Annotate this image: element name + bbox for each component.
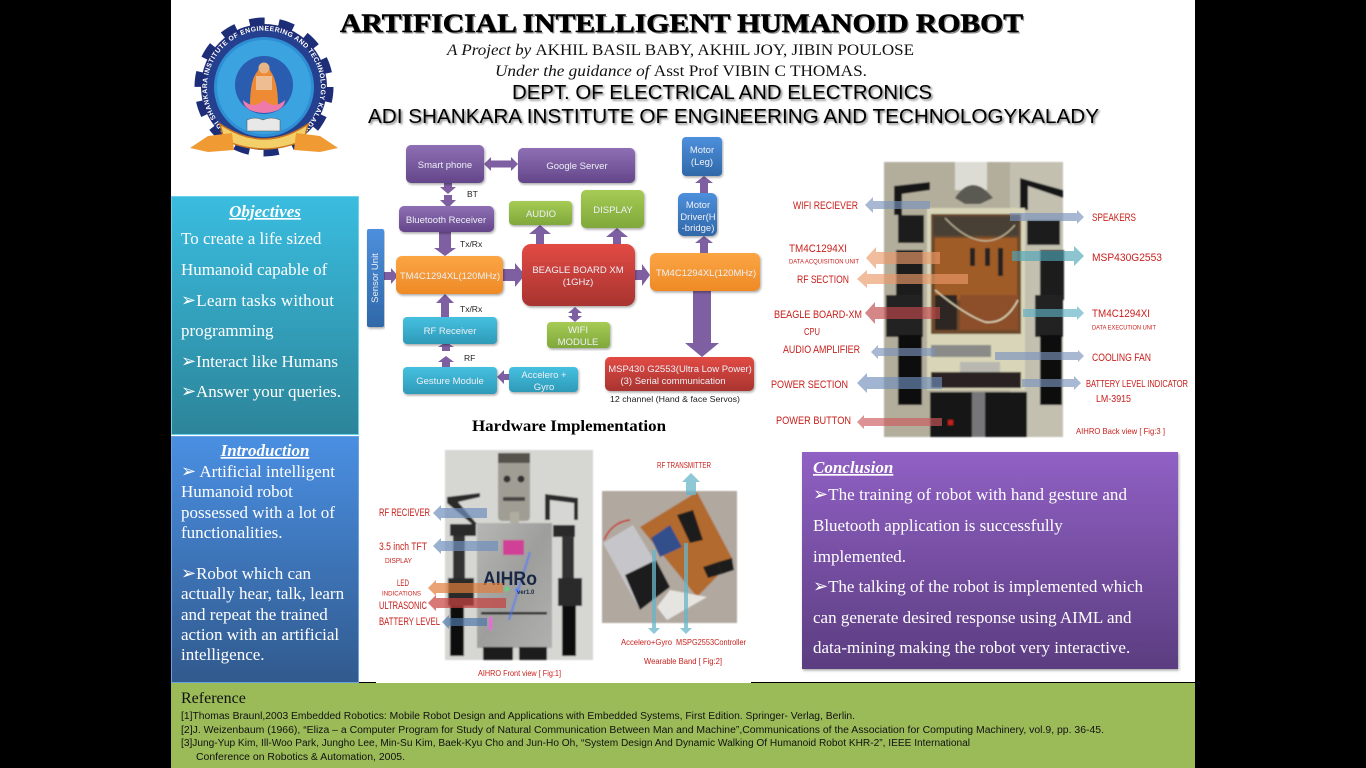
front view labels: 3.5 inch TFT <box>379 541 427 553</box>
panel: objectives <box>172 196 358 434</box>
box: accelero gyro: Gyro <box>534 382 554 393</box>
box: gesture module: Gesture Module <box>416 376 484 387</box>
title: ARTIFICIAL INTELLIGENT HUMANOID ROBOT <box>342 10 1025 40</box>
back view labels: BEAGLE BOARD-XM <box>774 309 862 321</box>
photo: robot front view <box>379 450 593 678</box>
controller arrow <box>680 543 692 634</box>
accelero arrow <box>648 550 660 634</box>
robot version lettering: ver1.0 <box>517 590 535 596</box>
back view labels: TM4C1294XI <box>789 243 847 255</box>
back view labels: POWER SECTION <box>771 379 848 391</box>
box: audio <box>509 201 572 225</box>
box: beagle board <box>522 244 635 306</box>
panel: conclusion <box>802 452 1178 669</box>
box: smart phone <box>406 145 484 183</box>
introduction text: ➢Robot which can <box>181 563 312 584</box>
back view labels: COOLING FAN <box>1092 352 1151 364</box>
diagram labels: RF <box>464 353 475 363</box>
back view labels: DATA ACQUISITION UNIT <box>789 258 859 266</box>
introduction text: ➢ Artificial intelligent <box>181 461 335 482</box>
introduction heading: Introduction <box>220 441 309 460</box>
box: accelero gyro: Accelero + <box>521 370 567 381</box>
title foreground: ARTIFICIAL INTELLIGENT HUMANOID ROBOT <box>340 8 1023 38</box>
conclusion text: ➢The talking of the robot is implemented which <box>813 576 1144 597</box>
block diagram <box>367 137 760 404</box>
box: motor leg: Motor <box>690 145 714 156</box>
objectives text <box>181 229 341 402</box>
black rules above reference band <box>359 682 376 683</box>
box: msp430: MSP430 G2553(Ultra Low Power) <box>608 364 752 375</box>
panel: introduction <box>172 436 358 682</box>
box: display: DISPLAY <box>593 205 633 216</box>
box: bluetooth receiver <box>399 206 494 232</box>
box: left controller <box>396 256 503 294</box>
back view labels: MSP430G2553 <box>1092 252 1162 264</box>
objectives text: ➢Interact like Humans <box>181 351 338 372</box>
diagram labels: Tx/Rx <box>460 304 483 314</box>
conclusion text: implemented. <box>813 547 906 566</box>
back view labels: SPEAKERS <box>1092 212 1136 224</box>
box: gesture module <box>403 367 497 394</box>
college logo <box>190 18 338 156</box>
guide line: Under the guidance of Asst Prof VIBIN C THOMAS. <box>495 63 867 80</box>
rf transmitter arrow <box>682 473 700 495</box>
box: msp430: (3) Serial communication <box>620 376 726 387</box>
front view labels: BATTERY LEVEL <box>379 616 440 628</box>
objectives text: Humanoid capable of <box>181 260 328 279</box>
box: right controller: TM4C1294XL(120MHz) <box>656 268 756 279</box>
wearable band labels <box>621 460 746 666</box>
wearable band labels: MSPG2553Controller <box>676 637 746 647</box>
conclusion text: can generate desired response using AIML and <box>813 608 1132 627</box>
box: accelero gyro <box>509 367 578 393</box>
box: wifi module: WIFI <box>568 325 588 336</box>
reference list: [1]Thomas Braunl,2003 Embedded Robotics: Mobile Robot Design and Applications with Embedded Systems, First Edition. Springer- Verlag, Berlin. <box>181 711 855 722</box>
box: motor driver <box>678 193 717 236</box>
front view labels: ULTRASONIC <box>379 600 427 612</box>
diagram labels: BT <box>467 189 478 199</box>
front view labels: AIHRO Front view [ Fig:1] <box>478 668 561 678</box>
objectives text: ➢Learn tasks without <box>181 290 334 311</box>
reference list <box>181 711 1104 763</box>
box: smart phone: Smart phone <box>418 160 472 171</box>
front view labels: INDICATIONS <box>382 590 422 598</box>
introduction text: intelligence. <box>181 645 265 664</box>
diagram labels <box>460 189 740 404</box>
conclusion text: ➢The training of robot with hand gesture and <box>813 484 1128 505</box>
front view labels <box>379 507 561 678</box>
college logo: ADI SHANKARA INSTITUTE OF ENGINEERING AND TECHNOLOGY KALADY <box>202 26 326 132</box>
box: beagle board: (1GHz) <box>563 277 593 288</box>
reference list: [2]J. Weizenbaum (1966), “Eliza – a Computer Program for Study of Natural Communication Between Man and Machine”,Communications of the Association for Computing Machinery, vol.9, pp. 36-45. <box>181 725 1104 736</box>
box: motor driver: Motor <box>686 200 710 211</box>
institute: ADI SHANKARA INSTITUTE OF ENGINEERING AND TECHNOLOGYKALADY <box>368 106 1099 128</box>
front view labels: LED <box>397 578 409 589</box>
back view labels: TM4C1294XI <box>1092 308 1150 320</box>
panel: reference <box>171 683 1195 768</box>
back view labels: AUDIO AMPLIFIER <box>783 344 860 356</box>
box: wifi module <box>547 322 610 348</box>
box: google server: Google Server <box>546 161 608 172</box>
box: motor driver: -bridge) <box>682 223 714 234</box>
box: audio: AUDIO <box>526 209 556 220</box>
box: google server <box>518 148 635 183</box>
reference list: Conference on Robotics & Automation, 2005. <box>196 752 405 763</box>
poster background <box>171 0 1195 768</box>
back view labels: CPU <box>804 327 820 338</box>
diagram labels: Tx/Rx <box>460 239 483 249</box>
box: rf receiver: RF Receiver <box>424 326 476 337</box>
back view labels: WIFI RECIEVER <box>793 200 858 212</box>
reference heading: Reference <box>181 690 246 707</box>
back view labels <box>771 200 1188 436</box>
conclusion heading: Conclusion <box>813 458 893 477</box>
wearable band labels: RF TRANSMITTER <box>657 460 711 470</box>
box: display <box>581 190 644 228</box>
reference list: [3]Jung-Yup Kim, Ill-Woo Park, Jungho Lee, Min-Su Kim, Baek-Kyu Cho and Jun-Ho Oh, “System Design And Dynamic Walking Of Humanoid Robot KHR-2”, IEEE International <box>181 738 970 749</box>
introduction text: Humanoid robot <box>181 482 293 501</box>
photo: wearable band <box>602 460 746 666</box>
front view labels: RF RECIEVER <box>379 507 430 519</box>
objectives text: To create a life sized <box>181 229 322 248</box>
back view labels: BATTERY LEVEL INDICATOR <box>1086 378 1188 390</box>
photo: robot back view <box>771 162 1188 437</box>
introduction text: functionalities. <box>181 523 283 542</box>
introduction text <box>181 461 345 664</box>
box: motor leg: (Leg) <box>691 157 713 168</box>
box: bluetooth receiver: Bluetooth Receiver <box>406 215 486 226</box>
diagram arrows <box>384 157 719 384</box>
back view labels: POWER BUTTON <box>776 415 851 427</box>
back view callout arrows <box>857 197 1084 429</box>
introduction text: possessed with a lot of <box>181 503 335 522</box>
authors line: A Project by AKHIL BASIL BABY, AKHIL JOY, JIBIN POULOSE <box>446 42 914 59</box>
box: sensor unit: Sensor Unit <box>370 253 381 303</box>
box: sensor unit <box>367 229 384 327</box>
box: left controller: TM4C1294XL(120MHz) <box>400 271 500 282</box>
heading: hardware implementation: Hardware Implementation <box>472 418 666 435</box>
wearable band labels: Wearable Band [ Fig:2] <box>644 656 722 666</box>
back view labels: AIHRO Back view [ Fig:3 ] <box>1076 426 1165 436</box>
box: motor driver: Driver(H <box>680 212 716 223</box>
introduction text: action with an artificial <box>181 625 339 644</box>
box: motor leg <box>682 137 722 176</box>
objectives text: ➢Answer your queries. <box>181 381 341 402</box>
front view labels: DISPLAY <box>385 556 412 565</box>
box: rf receiver <box>403 317 497 344</box>
conclusion text: Bluetooth application is successfully <box>813 516 1063 535</box>
conclusion text <box>813 484 1144 657</box>
back view labels: LM-3915 <box>1096 393 1131 405</box>
conclusion text: data-mining making the robot very interactive. <box>813 638 1130 657</box>
box: wifi module: MODULE <box>558 337 598 348</box>
wearable band labels: Accelero+Gyro <box>621 637 672 647</box>
box: right controller <box>650 253 760 291</box>
front view callout arrows <box>428 505 506 629</box>
diagram labels: 12 channel (Hand & face Servos) <box>610 394 740 404</box>
back view labels: RF SECTION <box>797 274 849 286</box>
back view labels: DATA EXECUTION UNIT <box>1092 324 1156 332</box>
introduction text: actually hear, talk, learn <box>181 584 345 603</box>
box: beagle board: BEAGLE BOARD XM <box>532 265 624 276</box>
department: DEPT. OF ELECTRICAL AND ELECTRONICS <box>512 82 932 104</box>
box: msp430 <box>605 357 754 391</box>
robot chest lettering: AIHRo <box>483 569 537 590</box>
objectives heading: Objectives <box>229 202 301 221</box>
introduction text: and repeat the trained <box>181 605 328 624</box>
objectives text: programming <box>181 321 274 340</box>
